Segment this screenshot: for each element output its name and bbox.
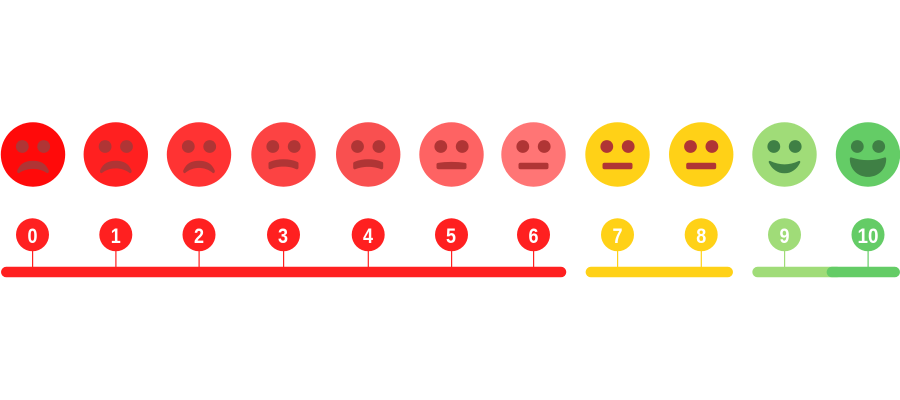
marker 9: 9	[780, 224, 790, 248]
marker 4	[352, 218, 385, 268]
face 9: smile	[752, 122, 817, 187]
face 7: neutral yellow	[585, 122, 650, 187]
light green scale bar	[752, 267, 842, 277]
marker 8	[685, 218, 718, 268]
marker 10	[852, 218, 884, 268]
green scale bar	[827, 267, 900, 277]
face 0: deep frown	[1, 122, 65, 187]
marker 3	[267, 218, 300, 268]
red scale bar	[1, 267, 566, 277]
marker 7: 7	[612, 224, 623, 248]
face 5: nearly flat mouth	[419, 122, 484, 187]
marker 3: 3	[278, 224, 288, 248]
marker 0	[16, 218, 49, 268]
marker 9	[768, 218, 801, 268]
marker 2: 2	[194, 224, 204, 248]
marker 4: 4	[363, 224, 373, 248]
face 2: frown	[167, 122, 231, 187]
face 6: flat mouth	[501, 122, 566, 187]
marker 1: 1	[111, 224, 121, 248]
face 10: big open smile	[836, 122, 900, 187]
marker 6: 6	[528, 224, 539, 248]
marker 5: 5	[446, 224, 456, 248]
marker 8: 8	[696, 224, 706, 248]
face 4: slight frown	[336, 122, 400, 187]
yellow scale bar	[586, 267, 733, 277]
face 8: neutral yellow	[669, 122, 733, 187]
marker 1	[99, 218, 132, 268]
marker 7	[601, 218, 634, 268]
face 3: slight frown	[251, 122, 316, 187]
marker 2	[182, 218, 216, 268]
marker 0: 0	[28, 224, 38, 248]
face 1: deep frown	[84, 122, 148, 187]
marker 5	[435, 218, 468, 268]
marker 6	[517, 218, 550, 268]
marker 10: 10	[858, 224, 879, 248]
